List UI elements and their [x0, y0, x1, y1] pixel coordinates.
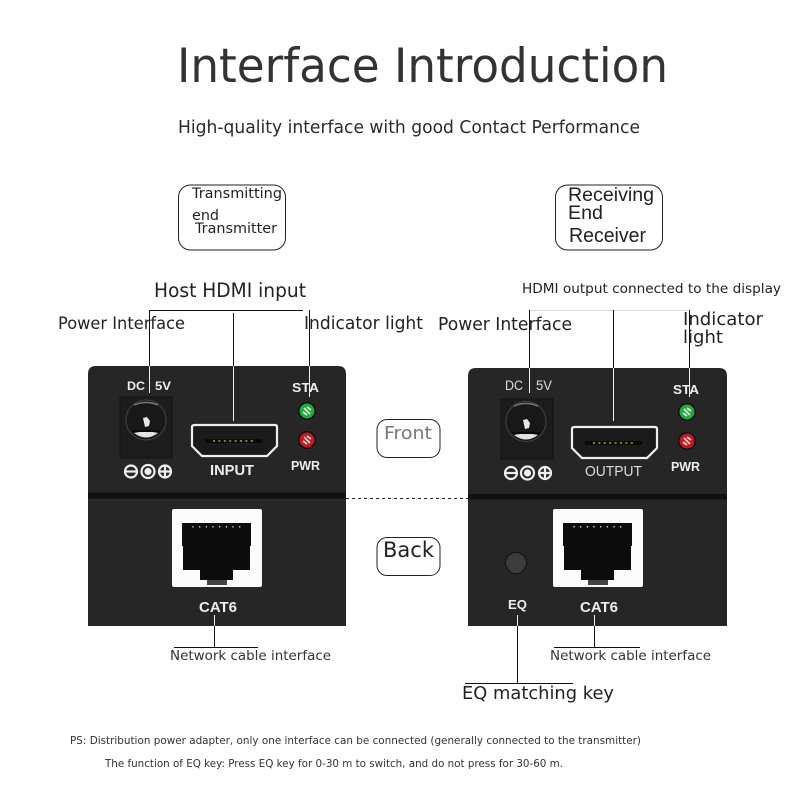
front label: Front [384, 423, 432, 444]
HDMI port [572, 427, 657, 458]
indicator lights: PWR [671, 460, 700, 474]
transmitter back panel: CAT6 [199, 600, 237, 616]
transmitter callout labels [58, 279, 423, 334]
transmitter callout labels: Indicator light [304, 314, 423, 334]
transmitter callout labels: Power Interface [58, 314, 185, 333]
DC 5V marking: DC [505, 378, 523, 393]
title: Interface Introduction [177, 39, 668, 94]
EQ callout: EQ matching key [462, 684, 614, 704]
transmitter leader lines [149, 310, 310, 421]
indicator lights: PWR [291, 459, 320, 473]
receiver callout labels: HDMI output connected to the display [522, 281, 781, 297]
receiver back panel [468, 494, 727, 626]
footnote: EQ key: The function of EQ key: Press EQ key for 0-30 m to switch, and do not press for 30-60 m. [104, 758, 563, 770]
receiver label box: Receiving [568, 185, 654, 206]
front label [377, 420, 440, 458]
left network cable callout: Network cable interface [170, 648, 331, 664]
receiver callout labels [438, 281, 781, 348]
indicator lights: STA [292, 380, 320, 395]
receiver label box: Receiver [569, 225, 646, 247]
DC 5V marking: 5V [536, 378, 552, 393]
receiver callout labels: Power Interface [438, 315, 572, 335]
DC 5V marking [505, 378, 552, 393]
indicator lights: STA [673, 382, 700, 397]
receiver label box [556, 185, 662, 250]
transmitter label box: end [192, 208, 219, 224]
transmitter device [88, 366, 346, 626]
power jack [501, 399, 553, 459]
polarity symbols [125, 465, 171, 478]
HDMI port [192, 425, 277, 456]
receiver front panel: OUTPUT [585, 464, 642, 480]
polarity symbols [505, 466, 551, 480]
receiver label box: End [568, 203, 603, 224]
back label [377, 538, 440, 576]
receiver device [468, 368, 727, 626]
RJ45 port [553, 509, 643, 587]
transmitter label box: Transmitter [194, 221, 277, 237]
receiver leader lines [530, 310, 690, 421]
indicator lights [671, 382, 700, 474]
right network cable callout [550, 615, 711, 664]
transmitter back panel [88, 492, 346, 626]
receiver back panel: EQ [508, 598, 527, 612]
right network cable callout: Network cable interface [550, 648, 711, 664]
DC 5V marking [127, 379, 171, 393]
footnote: power adapter: PS: Distribution power adapter, only one interface can be connected (generally connected to the transmitter) [70, 735, 641, 747]
receiver front panel [468, 368, 727, 496]
transmitter front panel [88, 366, 346, 494]
receiver back panel: CAT6 [580, 600, 618, 616]
transmitter label box [178, 185, 286, 250]
EQ callout [462, 615, 614, 704]
RJ45 port [172, 509, 262, 587]
subtitle: High-quality interface with good Contact Performance [178, 118, 640, 138]
receiver callout labels: Indicator [683, 309, 764, 330]
DC 5V marking: DC [127, 379, 145, 393]
transmitter label box: Transmitting [191, 186, 282, 202]
power jack [120, 397, 172, 458]
front to back dashed connector [346, 498, 468, 500]
left network cable callout [170, 615, 331, 664]
indicator lights [291, 380, 320, 473]
receiver callout labels: light [683, 327, 723, 348]
transmitter callout labels: Host HDMI input [154, 279, 306, 302]
back label: Back [383, 538, 435, 563]
DC 5V marking: 5V [155, 379, 171, 393]
EQ button [506, 552, 526, 574]
transmitter front panel: INPUT [210, 463, 254, 479]
